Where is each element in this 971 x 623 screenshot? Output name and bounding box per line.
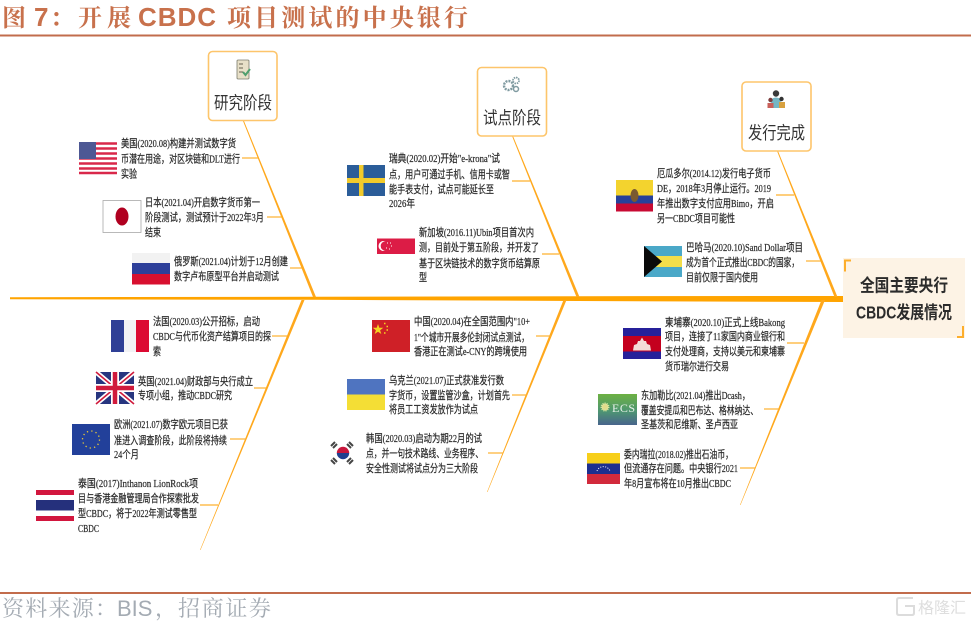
text: Bahamas: 成为首个正式推出CBDC的国家， [686,255,799,269]
text: Singapore: 新加坡(2016.11)Ubin项目首次内 [419,225,534,239]
text: Sweden: 2026年 [389,196,415,210]
icon: people [768,90,785,108]
item: United Kingdom [96,372,266,404]
item: China [372,314,551,358]
panel: issuance complete [616,82,838,297]
item: United States [79,136,258,180]
bone: lower middle [487,300,566,492]
bone: lower left [200,300,304,550]
text: Singapore: 型 [419,270,427,284]
text: Russia [174,254,288,283]
item: Thailand [36,476,218,535]
icon: checklist document [237,60,250,79]
text: France: 法国(2020.03)公开招标，启动 [153,314,260,328]
text: France: 索 [153,344,161,358]
icon: gears [504,78,519,92]
flag: Thailand [36,490,74,521]
bone: research stage [243,121,316,297]
flag: China [372,320,410,352]
item: Singapore [377,225,559,284]
text: Cambodia: 支付处理商，支持以美元和柬埔寨 [665,344,785,358]
source note [2,596,271,622]
text: European Union: 欧洲(2021.07)数字欧元项目已获 [114,417,228,431]
item: Cambodia [623,315,804,373]
text: Cambodia [665,315,785,373]
text: Bahamas [686,241,803,284]
text: Cambodia: 柬埔寨(2020.10)正式上线Bakong [665,315,785,329]
text: Singapore [419,225,540,284]
text: Ecuador: 厄瓜多尔(2014.12)发行电子货币 [657,166,771,180]
title: 图 [2,5,26,32]
text: Ukraine: 乌克兰(2021.07)正式获准发行数 [389,373,504,387]
text: Venezuela: 年8月宣布将在10月推出CBDC [624,476,731,490]
text: United States: 币潜在用途，对区块链和DLT进行 [121,152,240,166]
bone: issuance complete [777,151,838,297]
item: European Union [72,417,246,461]
heading box: pilot stage [478,68,546,136]
title: 开展 [78,5,131,32]
panel: lower right branch [587,300,825,505]
flag: Ecuador [616,180,653,212]
flag: Ukraine [347,379,385,410]
text: United Kingdom: 英国(2021.04)财政部与央行成立 [138,374,253,388]
flag: France [111,320,149,352]
text: France: CBDC与代币化资产结算项目的探 [153,329,271,343]
text: United States: 实验 [121,166,137,180]
text: Japan: 阶段测试，测试预计于2022年3月 [145,210,264,224]
text: Ecuador: 另一CBDC项目可能性 [657,211,735,225]
panel: pilot stage [347,68,580,297]
source note: BIS [117,596,152,621]
panel: lower middle branch [331,300,566,492]
text: United States [121,136,240,180]
text: Venezuela: 但流通存在问题。中央银行2021 [624,461,738,475]
text: Thailand: 泰国(2017)Inthanon LionRock项 [78,476,198,490]
logo: ECS [598,394,637,425]
panel: research stage [79,52,316,297]
source note: ， [155,596,177,622]
text: South Korea: 韩国(2020.03)启动为期22月的试 [366,431,482,445]
text: Bahamas: 巴哈马(2020.10)Sand Dollar项目 [686,241,803,254]
item: Sweden [347,151,530,210]
text: Russia: 俄罗斯(2021.04)计划于12月创建 [174,254,288,268]
text: Cambodia: 货币瑞尔进行交易 [665,359,729,373]
heading box: research stage: 研究阶段 [214,93,272,113]
text: South Korea: 安全性测试将试点分为三大阶段 [366,461,478,475]
title: 项目测试的中央银行 [227,5,468,32]
text: Ecuador [657,166,774,225]
heading box: pilot stage: 试点阶段 [483,108,541,128]
text: Russia: 数字卢布原型平台并启动测试 [174,269,279,283]
flag: Russia [132,253,170,284]
title: ： [50,5,74,32]
text: Ukraine: 字货币，设置监管沙盒，计划首先 [389,388,510,402]
text: Japan: 结束 [145,226,161,239]
flag: Venezuela [587,453,620,484]
text: Cambodia: 项目，连接了11家国内商业银行和 [665,329,785,343]
text: Thailand: 型CBDC，将于2022年测试零售型 [78,506,197,520]
text: France [153,314,271,358]
text: Sweden: 点，用户可通过手机、信用卡或智 [389,167,510,181]
heading box: issuance complete: 发行完成 [748,123,805,143]
text: Sweden [389,151,510,210]
text: Sweden: 瑞典(2020.02)开始"e-krona"试 [389,151,500,165]
flag: United Kingdom [96,372,134,404]
text: Japan: 日本(2021.04)开启数字货币第一 [145,195,260,209]
heading box: research stage [208,52,277,120]
item: Eastern Caribbean [598,388,779,431]
bone: lower right [740,300,825,505]
text: European Union: 24个月 [114,448,139,461]
fishbone spine [10,296,843,302]
logo: ECS: ECS [612,401,635,415]
text: Bahamas: 目前仅限于国内使用 [686,270,758,284]
text: United Kingdom: 专项小组，推动CBDC研究 [138,388,232,402]
central topic box [843,258,965,338]
text: China: 中国(2020.04)在全国范围内"10+ [414,314,530,328]
flag: Japan [103,200,141,232]
item: Ecuador [616,166,794,225]
title: CBDC [138,2,216,32]
text: Thailand: 目与香港金融管理局合作探索批发 [78,491,199,505]
central topic box: 全国主要央行 [860,276,948,296]
text: Venezuela: 委内瑞拉(2018.02)推出石油币， [624,447,733,461]
title [2,2,468,32]
text: Eastern Caribbean: 东加勒比(2021.04)推出Dcash， [641,388,750,402]
bone: pilot stage [512,136,580,297]
flag: Bahamas [644,246,682,277]
watermark logo: 格隆汇 [918,599,966,617]
text: United States: 美国(2020.08)构建并测试数字货 [121,136,236,150]
text: Ecuador: DE，2018年3月停止运行。2019 [657,181,771,195]
item: Bahamas [644,241,821,284]
text: Ukraine [389,373,510,416]
text: Eastern Caribbean: 圣基茨和尼维斯、圣卢西亚 [641,417,738,431]
item: South Korea [331,431,503,475]
item: Russia [132,253,302,284]
text: Singapore: 基于区块链技术的数字货币结算原 [419,256,540,270]
text: United Kingdom [138,374,253,402]
text: China: 1"个城市开展多伦封闭试点测试， [414,330,529,344]
text: Ecuador: 年推出数字支付应用Bimo，开启 [657,196,774,210]
text: South Korea: 点，并一句技术路线、业务程序、 [366,446,483,460]
heading box: issuance complete [742,82,811,151]
flag: South Korea [331,442,353,464]
text: European Union [114,417,228,461]
text: Singapore: 测，目前处于第五阶段，并开发了 [419,240,539,254]
flag: Singapore [377,238,415,254]
flag: Sweden [347,165,385,196]
text: Venezuela [624,447,738,490]
text: China: 香港正在测试e-CNY的跨境使用 [414,344,527,358]
source note: 招商证券 [178,596,271,621]
text: Eastern Caribbean: 覆盖安提瓜和巴布达、格林纳达、 [641,403,758,417]
item: Ukraine [347,373,527,416]
panel: lower left branch [36,300,304,550]
text: Eastern Caribbean [641,388,758,431]
text: Ukraine: 将员工工资发放作为试点 [389,402,478,416]
source note: 资料来源： [2,596,117,621]
watermark logo [897,598,966,617]
text: China [414,314,530,358]
flag: Cambodia [623,328,661,359]
title: 7 [34,2,48,32]
text: Thailand [78,476,199,535]
item: Japan [103,195,282,239]
item: France [111,314,287,358]
text: South Korea [366,431,483,475]
flag: European Union [72,424,110,455]
text: Thailand: CBDC [78,523,99,535]
item: Venezuela [587,447,755,490]
text: European Union: 准进入调查阶段，此阶段将持续 [114,433,227,447]
flag: United States [79,142,117,174]
text: Sweden: 能手表支付，试点可能延长至 [389,182,494,196]
text: Japan [145,195,264,239]
